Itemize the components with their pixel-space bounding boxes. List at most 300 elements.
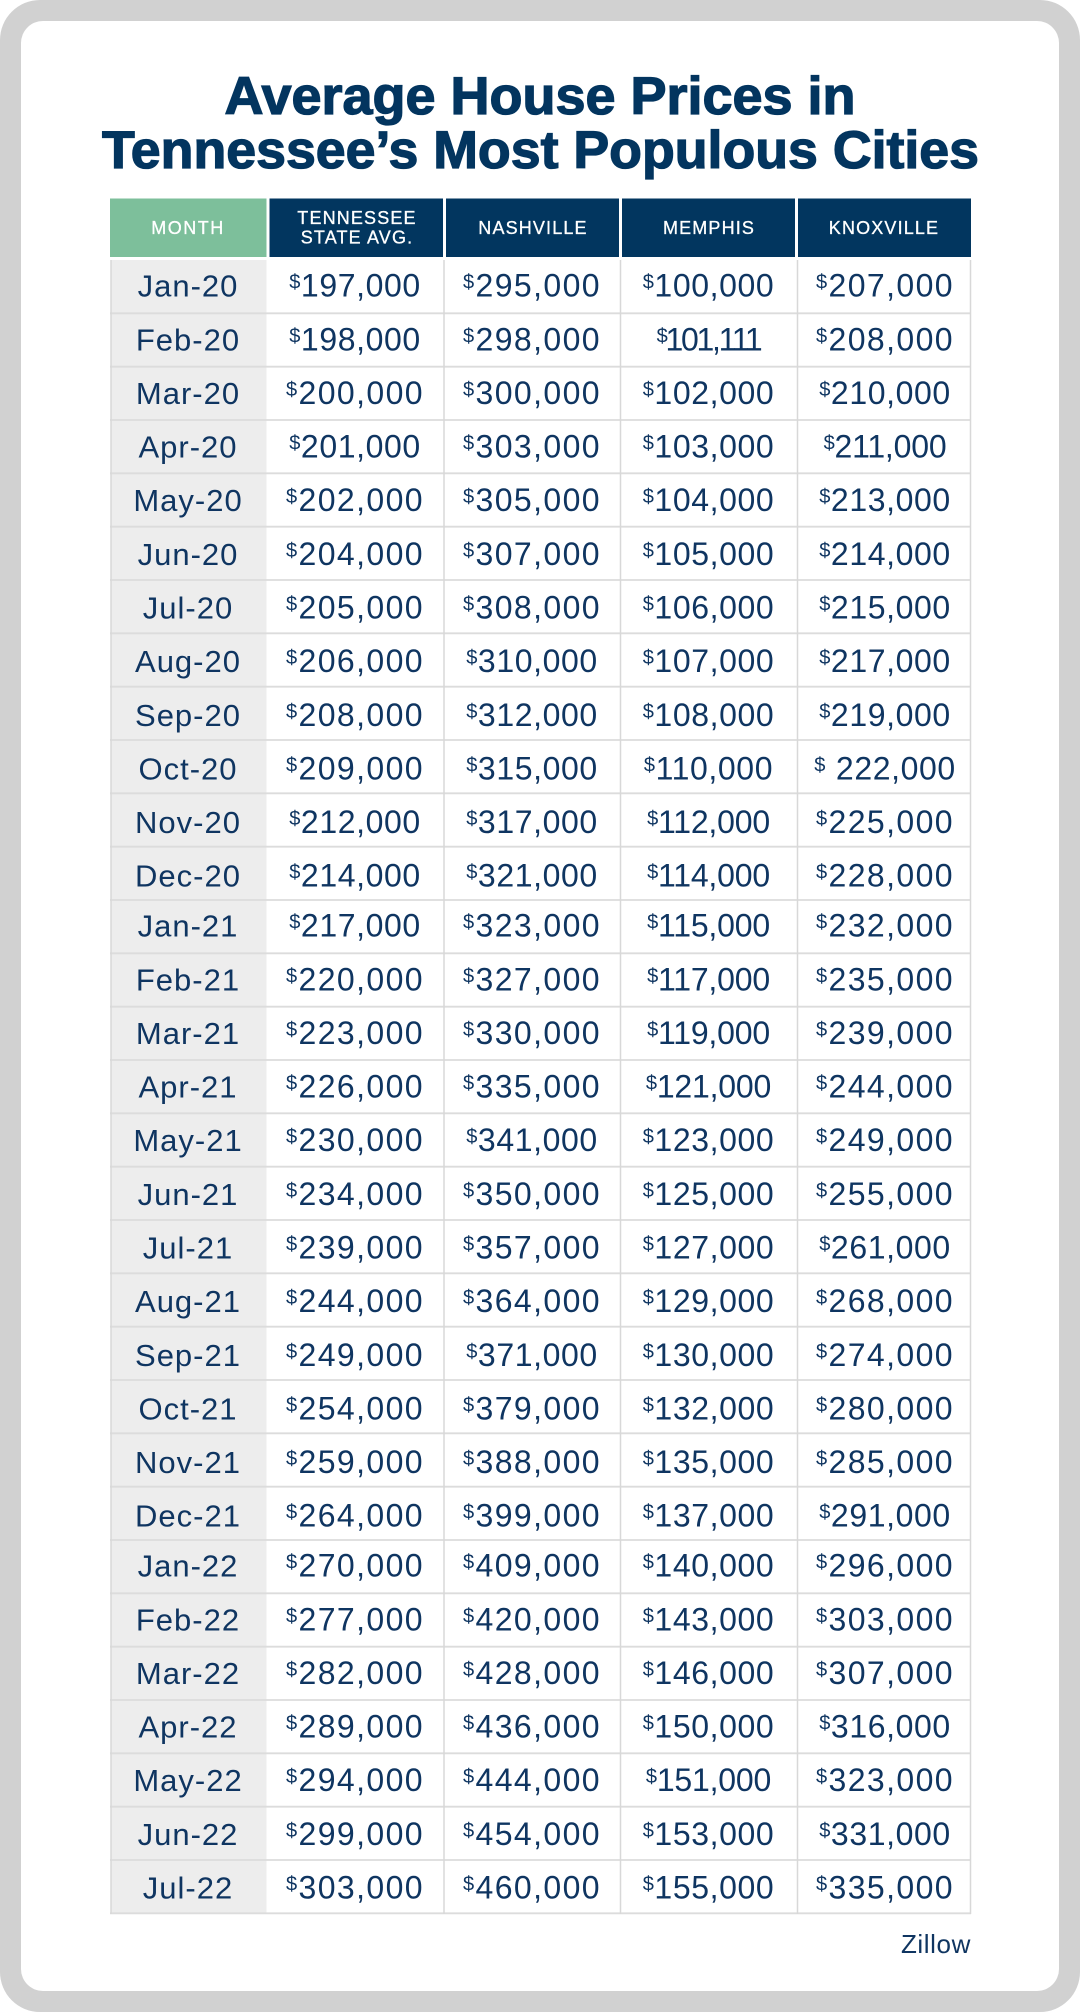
row: Jul-20: 215,000 — [831, 589, 951, 625]
row: Feb-22: $ — [816, 1605, 829, 1627]
row: Jun-20: $ — [463, 540, 476, 562]
row: Oct-20: $ — [466, 754, 478, 776]
row: Jan-21: $ — [647, 912, 658, 934]
row: Nov-20: 212,000 — [301, 804, 421, 840]
row: Aug-21: 244,000 — [299, 1283, 424, 1319]
row: Oct-21: 280,000 — [829, 1390, 954, 1426]
row: Apr-20 — [138, 429, 946, 465]
row: Feb-21: $ — [463, 965, 476, 987]
row: Aug-21: $ — [286, 1287, 299, 1309]
row: Jun-22: $ — [819, 1820, 831, 1842]
row: Feb-20: 198,000 — [301, 321, 421, 357]
row: Aug-21: $ — [816, 1287, 829, 1309]
header: Tennessee state average: STATE AVG. — [301, 228, 413, 248]
row: Nov-20: $ — [466, 808, 478, 830]
row: Aug-20: 206,000 — [299, 643, 424, 679]
row: Jan-22: 296,000 — [829, 1548, 954, 1584]
row: Apr-21 — [138, 1069, 954, 1105]
row: Aug-20: Aug-20 — [135, 644, 241, 679]
table rows — [133, 268, 956, 1906]
row: Nov-20: Nov-20 — [135, 805, 241, 840]
row: Jun-20: $ — [286, 540, 299, 562]
row: Jun-20: $ — [819, 540, 831, 562]
row: Feb-20 — [136, 321, 954, 357]
row: May-22: 323,000 — [829, 1762, 954, 1798]
row: Jul-20: $ — [463, 593, 476, 615]
row: Dec-21: $ — [819, 1502, 831, 1524]
row: Jun-20: 105,000 — [654, 536, 774, 572]
row: Apr-21: 244,000 — [829, 1069, 954, 1105]
row: May-22 — [133, 1762, 954, 1798]
row: Apr-20: 201,000 — [301, 429, 421, 465]
row: Aug-21: $ — [463, 1287, 476, 1309]
header: month — [110, 198, 266, 257]
row: Jan-20: Jan-20 — [138, 269, 238, 304]
row: Sep-20 — [135, 697, 951, 733]
row: Jan-21: 232,000 — [829, 908, 954, 944]
row: Dec-21: 137,000 — [654, 1498, 774, 1534]
row: Oct-21: Oct-21 — [138, 1391, 238, 1426]
row: Feb-20: Feb-20 — [136, 322, 240, 357]
row: Jul-22: 335,000 — [829, 1870, 954, 1906]
row: Dec-20: 114,000 — [658, 858, 770, 894]
row: Jan-22: $ — [643, 1552, 654, 1574]
row: Jul-21: $ — [819, 1234, 831, 1256]
row: Sep-20: 312,000 — [478, 697, 598, 733]
row: Aug-20 — [135, 643, 951, 679]
row: Nov-20: $ — [647, 808, 658, 830]
row: Jan-20: 295,000 — [476, 268, 601, 304]
row: May-20: $ — [819, 486, 831, 508]
row: Sep-21 — [135, 1337, 954, 1373]
row: Jun-21: 350,000 — [476, 1176, 601, 1212]
row: Dec-21 — [135, 1498, 951, 1534]
row: Jan-21: $ — [463, 912, 476, 934]
row: Nov-21: $ — [643, 1448, 654, 1470]
row: Jun-22 — [138, 1816, 951, 1852]
row: Jul-20: 106,000 — [654, 589, 774, 625]
row: Mar-21: 330,000 — [476, 1015, 601, 1051]
row: Oct-20: 209,000 — [299, 750, 424, 786]
row: Oct-21 — [138, 1390, 954, 1426]
row: Dec-20: 214,000 — [301, 858, 421, 894]
row: Jun-22: 454,000 — [476, 1816, 601, 1852]
row: Oct-21: 132,000 — [654, 1390, 774, 1426]
month column background — [111, 260, 266, 1914]
title: Average House Prices in — [224, 67, 856, 126]
row: Mar-21: Mar-21 — [136, 1016, 240, 1051]
row: May-20: 202,000 — [299, 482, 424, 518]
row: Feb-22: $ — [643, 1605, 654, 1627]
row: Feb-21: 235,000 — [829, 961, 954, 997]
row: May-20: 104,000 — [654, 482, 774, 518]
row: Jan-21: $ — [289, 912, 301, 934]
row: Aug-20: $ — [819, 647, 831, 669]
row: Jan-20: 100,000 — [654, 268, 774, 304]
row: Nov-20: 317,000 — [478, 804, 598, 840]
row: Mar-22: $ — [286, 1659, 299, 1681]
row: Dec-20: $ — [466, 862, 478, 884]
row: Feb-20: $ — [657, 325, 668, 347]
row: Mar-22: $ — [463, 1659, 476, 1681]
row: Apr-20: $ — [824, 433, 835, 455]
row: Jul-22: 155,000 — [654, 1870, 774, 1906]
row: Jan-21: 217,000 — [301, 908, 421, 944]
row: Jul-20: $ — [819, 593, 831, 615]
row: May-21: 123,000 — [654, 1122, 774, 1158]
row: Sep-21: 130,000 — [654, 1337, 774, 1373]
header: Nashville — [446, 198, 619, 257]
row: Oct-21: 254,000 — [299, 1390, 424, 1426]
row: Jul-20: 205,000 — [299, 589, 424, 625]
header: Memphis — [622, 198, 795, 257]
row: Apr-21: 335,000 — [476, 1069, 601, 1105]
row: Feb-21: Feb-21 — [136, 962, 240, 997]
row: Mar-22: 146,000 — [654, 1655, 774, 1691]
row: Oct-20: 222,000 — [836, 750, 956, 786]
row: Mar-22: 428,000 — [476, 1655, 601, 1691]
row: Feb-22: 420,000 — [476, 1601, 601, 1637]
row: Mar-22: $ — [643, 1659, 654, 1681]
row: Sep-21: $ — [643, 1341, 654, 1363]
row: Feb-22: 277,000 — [299, 1601, 424, 1637]
row: Mar-20: $ — [643, 379, 654, 401]
row: Jun-21: 125,000 — [654, 1176, 774, 1212]
row: Aug-20: 107,000 — [654, 643, 774, 679]
row: Jun-20: Jun-20 — [138, 537, 238, 572]
row: Jun-22: $ — [463, 1820, 476, 1842]
row: Oct-20: $ — [814, 754, 826, 776]
row: Apr-22 — [138, 1709, 951, 1745]
row: Nov-21: 135,000 — [654, 1444, 774, 1480]
row: Jul-22: 303,000 — [299, 1870, 424, 1906]
row: Sep-20: 208,000 — [299, 697, 424, 733]
row: Jan-22 — [138, 1548, 954, 1584]
row: Mar-21: $ — [286, 1019, 299, 1041]
row: Jun-21: $ — [643, 1180, 654, 1202]
row: Dec-20: 228,000 — [829, 858, 954, 894]
row: May-22: 444,000 — [476, 1762, 601, 1798]
row: Feb-21: $ — [286, 965, 299, 987]
row: May-22: 294,000 — [299, 1762, 424, 1798]
row: Nov-21: $ — [286, 1448, 299, 1470]
row: Jul-20: $ — [286, 593, 299, 615]
row: May-20: 305,000 — [476, 482, 601, 518]
row: Jul-21: $ — [286, 1234, 299, 1256]
row: Sep-21: $ — [286, 1341, 299, 1363]
row: Jul-21: 127,000 — [654, 1230, 774, 1266]
row: Jan-22: $ — [286, 1552, 299, 1574]
row: Oct-21: $ — [286, 1394, 299, 1416]
row: Aug-20: 310,000 — [478, 643, 598, 679]
row: Sep-20: $ — [643, 701, 654, 723]
row: Sep-21: Sep-21 — [135, 1338, 241, 1373]
row: Apr-22: 289,000 — [299, 1709, 424, 1745]
row: Apr-21: 226,000 — [299, 1069, 424, 1105]
row: Jun-22: 331,000 — [831, 1816, 951, 1852]
row: Dec-21: 399,000 — [476, 1498, 601, 1534]
row: Sep-20: Sep-20 — [135, 698, 241, 733]
row: Apr-21: $ — [646, 1073, 657, 1095]
row: Apr-20: 211,000 — [835, 429, 946, 465]
row: Feb-20: $ — [463, 325, 476, 347]
row: Aug-21: 268,000 — [829, 1283, 954, 1319]
row: Jun-20: 214,000 — [831, 536, 951, 572]
row: Apr-21: 121,000 — [657, 1069, 771, 1105]
row: Feb-20: 208,000 — [829, 321, 954, 357]
header: Knoxville — [798, 198, 971, 257]
row: Sep-20: 219,000 — [831, 697, 951, 733]
row: Jul-20: $ — [643, 593, 654, 615]
row: Sep-20: $ — [819, 701, 831, 723]
row: Sep-21: 371,000 — [478, 1337, 598, 1373]
header: month: MONTH — [151, 218, 225, 238]
row: Feb-22: 143,000 — [654, 1601, 774, 1637]
header: Tennessee state average: TENNESSEE — [297, 208, 417, 228]
row: Feb-21: 327,000 — [476, 961, 601, 997]
table header — [110, 198, 971, 257]
row: Nov-21: 388,000 — [476, 1444, 601, 1480]
row: Nov-20: $ — [816, 808, 829, 830]
row: Jan-21: Jan-21 — [138, 909, 238, 944]
row: Jun-20: 307,000 — [476, 536, 601, 572]
row: Jun-20 — [138, 536, 951, 572]
row: Jan-20 — [138, 268, 954, 304]
row: Nov-20: 112,000 — [658, 804, 770, 840]
row: Apr-20: $ — [289, 433, 301, 455]
row: Jul-21: $ — [463, 1234, 476, 1256]
row: Jan-22: 270,000 — [299, 1548, 424, 1584]
row: Jun-20: 204,000 — [299, 536, 424, 572]
row: Jul-22: $ — [816, 1874, 829, 1896]
row: Oct-21: $ — [463, 1394, 476, 1416]
row: Apr-20: Apr-20 — [138, 430, 238, 465]
row: Nov-21: 285,000 — [829, 1444, 954, 1480]
row: Jan-20: $ — [816, 272, 829, 294]
row: Nov-21 — [135, 1444, 954, 1480]
row: Apr-20: 103,000 — [654, 429, 774, 465]
row: Jul-21: Jul-21 — [143, 1231, 233, 1266]
row: Dec-21: $ — [463, 1502, 476, 1524]
row: Jan-21 — [138, 908, 954, 944]
row: Mar-20 — [136, 375, 951, 411]
row: Jul-21 — [143, 1230, 951, 1266]
row: Nov-20: $ — [289, 808, 301, 830]
row: Jul-22: $ — [286, 1874, 299, 1896]
row: Jul-20: 308,000 — [476, 589, 601, 625]
row: May-21: 230,000 — [299, 1122, 424, 1158]
row: Jun-22: 153,000 — [654, 1816, 774, 1852]
row: May-20: $ — [286, 486, 299, 508]
row: Mar-22: 282,000 — [299, 1655, 424, 1691]
row: Aug-21: $ — [643, 1287, 654, 1309]
row: May-22: $ — [463, 1766, 476, 1788]
row: Nov-20 — [135, 804, 954, 840]
row: Feb-21 — [136, 961, 954, 997]
row: Feb-22 — [136, 1601, 954, 1637]
row: May-21: $ — [643, 1126, 654, 1148]
row: Jan-22: Jan-22 — [138, 1549, 238, 1584]
row: Mar-20: $ — [819, 379, 831, 401]
row: Apr-22: Apr-22 — [138, 1710, 238, 1745]
row: Feb-20: $ — [289, 325, 301, 347]
row: Sep-20: $ — [466, 701, 478, 723]
row: Oct-21: $ — [816, 1394, 829, 1416]
row: Jan-20: $ — [463, 272, 476, 294]
row: Mar-20: 300,000 — [476, 375, 601, 411]
row: Jun-22: $ — [286, 1820, 299, 1842]
row: Jan-20: $ — [643, 272, 654, 294]
row: Dec-20: $ — [816, 862, 829, 884]
row: Mar-22: 307,000 — [829, 1655, 954, 1691]
row: Apr-22: $ — [463, 1713, 476, 1735]
row: Aug-21 — [135, 1283, 954, 1319]
row: Mar-21: $ — [463, 1019, 476, 1041]
header: Memphis: MEMPHIS — [663, 218, 755, 238]
row: May-20: $ — [643, 486, 654, 508]
row: Aug-20: $ — [286, 647, 299, 669]
row: Feb-22: $ — [286, 1605, 299, 1627]
row: Oct-20: Oct-20 — [138, 751, 238, 786]
row: Sep-20: $ — [286, 701, 299, 723]
row: Apr-22: 316,000 — [831, 1709, 951, 1745]
row: Nov-21: $ — [816, 1448, 829, 1470]
row: Jan-22: 140,000 — [654, 1548, 774, 1584]
row: Jul-22: $ — [463, 1874, 476, 1896]
row: Feb-21: 117,000 — [658, 961, 770, 997]
row: Apr-22: $ — [819, 1713, 831, 1735]
row: Mar-20: $ — [286, 379, 299, 401]
row: Aug-21: Aug-21 — [135, 1284, 241, 1319]
source: Zillow: Zillow — [901, 1929, 971, 1959]
row: Jul-20: Jul-20 — [143, 590, 233, 625]
header: Tennessee state average — [270, 198, 443, 257]
row: Sep-20: 108,000 — [654, 697, 774, 733]
row: May-21: $ — [466, 1126, 478, 1148]
row: Aug-20: $ — [643, 647, 654, 669]
row: Jan-21: $ — [816, 912, 829, 934]
row: Sep-21: 274,000 — [829, 1337, 954, 1373]
row: Apr-21: $ — [286, 1073, 299, 1095]
row: Sep-21: 249,000 — [299, 1337, 424, 1373]
row: Jun-21: $ — [816, 1180, 829, 1202]
row: Feb-20: $ — [816, 325, 829, 347]
row: Mar-22: Mar-22 — [136, 1656, 240, 1691]
row: Jul-20 — [143, 590, 951, 626]
row: Nov-21: Nov-21 — [135, 1445, 241, 1480]
row: Mar-21: 223,000 — [299, 1015, 424, 1051]
row: Jan-20: $ — [289, 272, 301, 294]
row: Sep-21: $ — [466, 1341, 478, 1363]
row: Dec-21: Dec-21 — [135, 1499, 241, 1534]
row: Dec-20: 321,000 — [478, 858, 598, 894]
row: Jan-22: $ — [816, 1552, 829, 1574]
row: May-21: May-21 — [133, 1123, 243, 1158]
row: May-20 — [133, 482, 951, 518]
row: Jun-22: 299,000 — [299, 1816, 424, 1852]
row: Jun-20: $ — [643, 540, 654, 562]
row: Oct-21: 379,000 — [476, 1390, 601, 1426]
row: Mar-21 — [136, 1015, 954, 1051]
row: Jun-21: $ — [286, 1180, 299, 1202]
row: Nov-21: $ — [463, 1448, 476, 1470]
row: Mar-21: $ — [647, 1019, 658, 1041]
row: May-22: May-22 — [133, 1763, 243, 1798]
row: Mar-20: 200,000 — [299, 375, 424, 411]
row: Jan-21: 115,000 — [658, 908, 770, 944]
row: Jan-20: 207,000 — [829, 268, 954, 304]
row: Jul-22: Jul-22 — [143, 1871, 233, 1906]
row: Mar-20: Mar-20 — [136, 376, 240, 411]
row: Apr-21: $ — [816, 1073, 829, 1095]
row: Mar-21: 239,000 — [829, 1015, 954, 1051]
row: May-22: $ — [646, 1766, 657, 1788]
row: Dec-20: $ — [647, 862, 658, 884]
row: Dec-20: $ — [289, 862, 301, 884]
title: Tennessee’s Most Populous Cities — [102, 121, 979, 180]
row: Mar-22: $ — [816, 1659, 829, 1681]
row: Feb-21: 220,000 — [299, 961, 424, 997]
row: Mar-21: $ — [816, 1019, 829, 1041]
row: Apr-22: $ — [286, 1713, 299, 1735]
row: Jul-22: $ — [643, 1874, 654, 1896]
row: Feb-21: $ — [816, 965, 829, 987]
row: May-21 — [133, 1122, 954, 1158]
row: Mar-20: 210,000 — [831, 375, 951, 411]
row: Aug-21: 364,000 — [476, 1283, 601, 1319]
row: Apr-22: $ — [643, 1713, 654, 1735]
row: May-21: $ — [816, 1126, 829, 1148]
row: Oct-20: 315,000 — [478, 750, 598, 786]
row: Jun-21 — [138, 1176, 954, 1212]
row: May-20: 213,000 — [831, 482, 951, 518]
row: Oct-21: $ — [643, 1394, 654, 1416]
row: May-21: 249,000 — [829, 1122, 954, 1158]
row: May-20: May-20 — [133, 483, 243, 518]
row: Apr-20: $ — [643, 433, 654, 455]
row: Jul-21: 261,000 — [831, 1230, 951, 1266]
row: Apr-22: 150,000 — [654, 1709, 774, 1745]
row: Apr-20: 303,000 — [476, 429, 601, 465]
row: Feb-20: 101,111 — [666, 321, 762, 357]
row: Oct-20 — [138, 750, 956, 786]
row: Jan-22: $ — [463, 1552, 476, 1574]
row: Nov-20: 225,000 — [829, 804, 954, 840]
row: Jun-21: 234,000 — [299, 1176, 424, 1212]
row: Oct-20: 110,000 — [656, 750, 773, 786]
row: May-20: $ — [463, 486, 476, 508]
row: Feb-22: Feb-22 — [136, 1602, 240, 1637]
row: May-22: $ — [286, 1766, 299, 1788]
row: Sep-21: $ — [816, 1341, 829, 1363]
row: Mar-22 — [136, 1655, 954, 1691]
row: Dec-20 — [135, 858, 954, 894]
row: Oct-20: $ — [286, 754, 299, 776]
row: Dec-21: 291,000 — [831, 1498, 951, 1534]
header: Knoxville: KNOXVILLE — [829, 218, 939, 238]
row: Aug-20: $ — [466, 647, 478, 669]
row: Jun-21: 255,000 — [829, 1176, 954, 1212]
row: Jan-21: 323,000 — [476, 908, 601, 944]
row: Dec-20: Dec-20 — [135, 859, 241, 894]
row: Apr-21: Apr-21 — [138, 1070, 238, 1105]
row: Aug-21: 129,000 — [654, 1283, 774, 1319]
row: Jun-22: Jun-22 — [138, 1817, 238, 1852]
row: Mar-20: $ — [463, 379, 476, 401]
row: May-21: $ — [286, 1126, 299, 1148]
row: Jul-21: 239,000 — [299, 1230, 424, 1266]
row: Jul-22 — [143, 1870, 954, 1906]
